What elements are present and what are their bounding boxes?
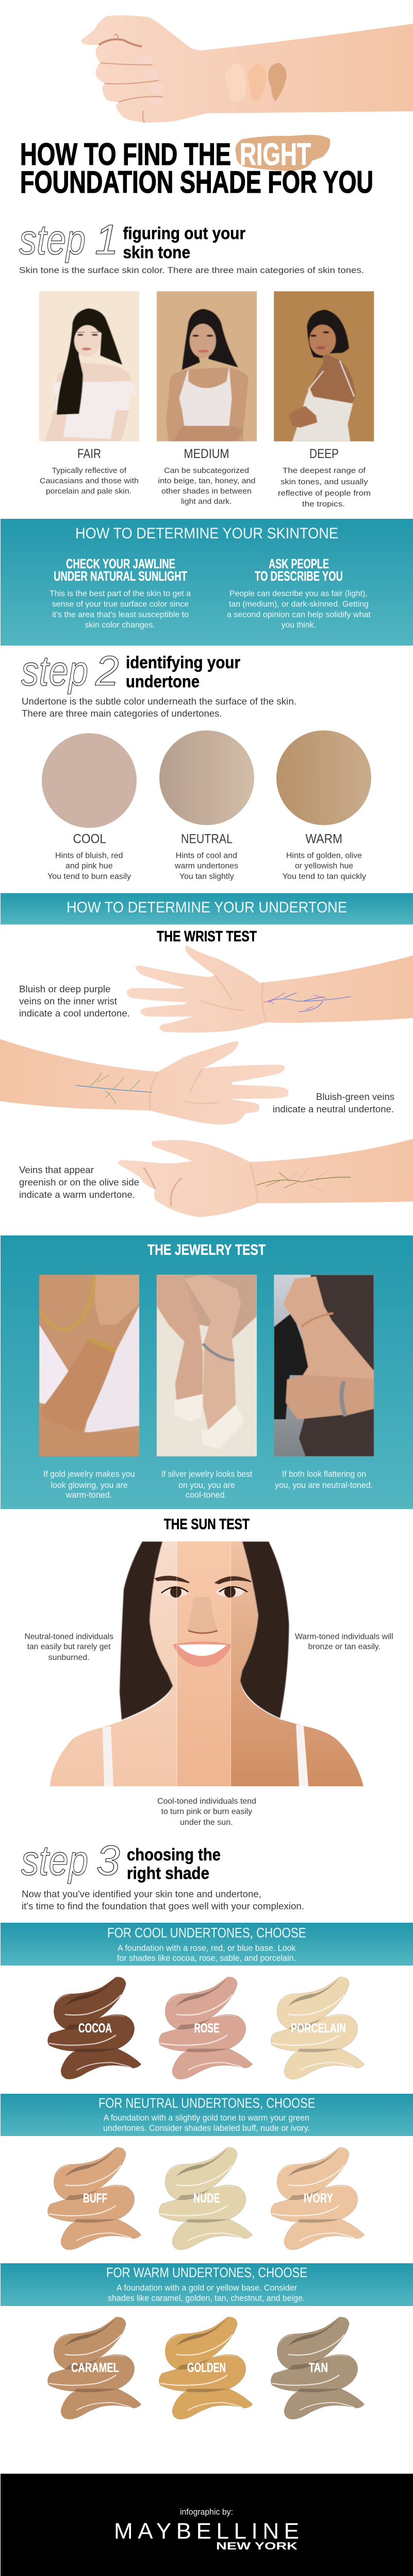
undertone: warm: Hints of golden, olive — [286, 852, 362, 860]
tip: ask people: tan (medium), or dark-skinned. Getting — [229, 600, 369, 609]
footer: infographic by: — [180, 2507, 233, 2517]
heading: the wrist test: THE WRIST TEST — [157, 928, 257, 945]
banner: cool undertones: FOR COOL UNDERTONES, CHOOSE — [107, 1925, 306, 1940]
caption: silver: If silver jewelry looks best — [161, 1469, 252, 1479]
caption: deep: the tropics. — [302, 500, 345, 509]
photo: silver jewelry — [154, 1272, 259, 1459]
tip: jawline: skin color changes. — [85, 621, 155, 630]
caption: gold — [43, 1469, 135, 1500]
undertone: warm: WARM — [305, 832, 342, 846]
caption: deep — [278, 447, 371, 509]
wrist test: neutral hand: indicate a neutral undertone. — [273, 1104, 394, 1114]
finger creases — [99, 34, 163, 123]
arm and fist — [81, 15, 413, 123]
banner: cool undertones: for shades like cocoa, rose, sable, and porcelain. — [117, 1954, 296, 1963]
banner: neutral undertones: A foundation with a slightly gold tone to warm your green — [104, 2113, 309, 2123]
heading: the sun test: THE SUN TEST — [164, 1516, 250, 1533]
photo: mixed jewelry — [271, 1272, 376, 1459]
caption: fair: porcelain and pale skin. — [46, 487, 131, 496]
banner: warm undertones: A foundation with a gold or yellow base. Consider — [117, 2283, 297, 2293]
swatch: porcelain: PORCELAIN — [291, 2021, 346, 2036]
undertone: cool: You tend to burn easily — [47, 872, 131, 881]
caption: fair: Typically reflective of — [52, 466, 127, 475]
undertone: neutral — [159, 731, 254, 881]
banner: cool undertones: A foundation with a rose, red, or blue base. Look — [118, 1943, 296, 1953]
step 3 intro — [22, 1889, 304, 1911]
wrist test: neutral hand: Bluish-green veins — [316, 1092, 394, 1102]
photo: sun test portrait — [50, 1541, 364, 1786]
step 2 heading: identifying your — [126, 653, 240, 672]
caption: both — [275, 1469, 373, 1490]
banner: cool undertones — [1, 1923, 413, 1965]
undertone: cool: and pink hue — [65, 861, 113, 871]
step 2 heading: undertone — [126, 672, 200, 691]
step 1 heading: figuring out your — [123, 224, 245, 243]
tip: jawline: sense of your true surface color since — [52, 600, 189, 609]
swatch: golden: GOLDEN — [187, 2361, 226, 2375]
swatch: tan — [271, 2317, 365, 2419]
foundation smear behind RIGHT — [235, 135, 330, 171]
step 1 heading: skin tone — [123, 243, 190, 262]
undertone: neutral: warm undertones — [174, 861, 238, 871]
tip: jawline: CHECK YOUR JAWLINE — [66, 556, 175, 571]
undertone: warm: or yellowish hue — [295, 861, 353, 871]
step 3 heading — [21, 1837, 221, 1884]
photo: gold jewelry — [37, 1272, 142, 1459]
photo: fair — [37, 289, 142, 443]
tip: ask people: you think. — [282, 621, 316, 630]
caption: medium: Can be subcategorized — [164, 466, 249, 475]
step 2 intro: Undertone is the subtle color underneath the surface of the skin. — [22, 697, 296, 707]
caption: fair: Caucasians and those with — [40, 477, 139, 485]
tip: jawline: UNDER NATURAL SUNLIGHT — [54, 568, 187, 584]
panel: the jewelry test: THE JEWELRY TEST — [147, 1242, 266, 1258]
tip: jawline: it's the area that's least susceptible to — [52, 611, 189, 619]
caption: gold: look glowing, you are — [51, 1481, 128, 1490]
panel: how to determine your skintone — [1, 519, 413, 646]
swatch: porcelain — [271, 1977, 365, 2079]
swatch: nude — [159, 2147, 253, 2250]
caption: both: If both look flattering on — [282, 1469, 366, 1479]
panel: how to determine your skintone: HOW TO DETERMINE YOUR SKINTONE — [75, 525, 338, 542]
swatch: ivory: IVORY — [304, 2191, 333, 2206]
step 1 heading — [19, 216, 245, 263]
step 3 heading: right shade — [127, 1863, 209, 1883]
foundation dabs — [225, 63, 287, 102]
step 2 intro: There are three main categories of undertones. — [22, 708, 222, 719]
banner: warm undertones — [1, 2263, 413, 2306]
caption: fair — [40, 447, 139, 496]
swatch: caramel: CARAMEL — [71, 2361, 119, 2375]
nails — [137, 54, 163, 106]
step 3 heading: step — [21, 1837, 88, 1884]
step 3 intro: it's time to find the foundation that goes well with your complexion. — [22, 1901, 304, 1911]
wrist test: warm hand: greenish or on the olive side — [19, 1177, 139, 1188]
swatch: caramel — [47, 2317, 141, 2419]
callout: neutral-toned — [25, 1632, 113, 1662]
caption: deep: DEEP — [309, 447, 339, 461]
wrist test: warm hand: indicate a warm undertone. — [19, 1190, 135, 1200]
veins — [76, 1073, 152, 1104]
caption: deep: reflective of people from — [278, 489, 371, 498]
veins — [263, 993, 350, 1012]
wrist test: cool hand — [19, 945, 413, 1032]
logo: Maybelline New York: MAYBELLINE — [114, 2519, 299, 2544]
callout: neutral-toned: tan easily but rarely get — [27, 1642, 111, 1651]
tip: ask people — [227, 556, 371, 630]
caption: silver: cool-toned. — [186, 1490, 227, 1500]
tip: ask people: People can describe you as fair (light), — [229, 589, 368, 598]
step 3 intro: Now that you've identified your skin tone and undertone, — [22, 1889, 261, 1899]
caption: medium — [158, 447, 256, 506]
caption: medium: MEDIUM — [184, 447, 229, 461]
step 1 heading: step — [19, 216, 86, 263]
hero: arm with foundation swatches — [81, 15, 413, 123]
caption: deep: skin tones, and usually — [280, 478, 368, 486]
swatch: rose — [159, 1977, 253, 2079]
banner: how to determine your undertone — [1, 893, 413, 924]
undertone: warm — [276, 731, 371, 881]
caption: gold: If gold jewelry makes you — [43, 1469, 135, 1479]
undertone: neutral: NEUTRAL — [181, 832, 233, 846]
wrist test: cool hand: Bluish or deep purple — [19, 984, 110, 994]
banner: warm undertones: shades like caramel, golden, tan, chestnut, and beige. — [108, 2294, 305, 2303]
callout: cool-toned — [157, 1797, 256, 1827]
step 2 heading: 2 — [95, 648, 119, 694]
undertone: neutral: Hints of cool and — [176, 852, 237, 860]
step 1 intro: Skin tone is the surface skin color. There are three main categories of skin tones. — [19, 265, 364, 275]
step 3 heading: choosing the — [127, 1845, 221, 1864]
swatch: buff: BUFF — [83, 2191, 107, 2206]
photo: deep — [271, 289, 376, 443]
swatch: tan: TAN — [309, 2361, 328, 2375]
wrist test: neutral hand — [0, 1039, 394, 1125]
panel: the jewelry test — [1, 1235, 413, 1509]
wrist test: warm hand — [19, 1139, 413, 1217]
step 3 heading: 3 — [96, 1837, 120, 1884]
tip: jawline — [49, 556, 191, 630]
photo: medium — [154, 289, 259, 443]
title: RIGHT — [240, 137, 311, 172]
banner: neutral undertones: FOR NEUTRAL UNDERTONES, CHOOSE — [98, 2095, 315, 2111]
swatch: rose: ROSE — [194, 2021, 220, 2036]
caption: gold: warm-toned. — [65, 1490, 112, 1500]
caption: silver — [161, 1469, 252, 1500]
caption: deep: The deepest range of — [283, 466, 366, 475]
undertone: cool: COOL — [73, 832, 106, 846]
callout: cool-toned: under the sun. — [180, 1818, 233, 1827]
callout: neutral-toned: sunburned. — [48, 1653, 90, 1662]
callout: warm-toned: bronze or tan easily. — [308, 1642, 381, 1651]
footer — [1, 2473, 413, 2576]
step 2 heading: step — [21, 648, 88, 694]
undertone: cool: Hints of bluish, red — [55, 852, 123, 860]
undertone: neutral: You tan slightly — [179, 872, 234, 881]
callout: neutral-toned: Neutral-toned individuals — [25, 1632, 113, 1641]
title — [20, 135, 373, 199]
swatch: nude: NUDE — [193, 2191, 220, 2206]
step 2 heading — [21, 648, 240, 694]
caption: silver: on you, you are — [178, 1481, 235, 1490]
callout: cool-toned: to turn pink or burn easily — [161, 1807, 252, 1816]
banner: neutral undertones: undertones. Consider shades labeled buff, nude or ivory. — [103, 2124, 310, 2133]
caption: medium: light and dark. — [181, 497, 232, 506]
banner: how to determine your undertone: HOW TO DETERMINE YOUR UNDERTONE — [67, 899, 347, 916]
swatch: ivory — [271, 2147, 365, 2250]
caption: both: you, you are neutral-toned. — [275, 1481, 373, 1490]
undertone: warm: You tend to tan quickly — [283, 872, 366, 881]
callout: warm-toned — [295, 1632, 393, 1651]
swatch: cocoa: COCOA — [78, 2021, 112, 2036]
callout: warm-toned: Warm-toned individuals will — [295, 1632, 393, 1641]
banner: warm undertones: FOR WARM UNDERTONES, CHOOSE — [106, 2265, 307, 2280]
caption: medium: into beige, tan, honey, and — [158, 477, 256, 485]
step 1 heading: 1 — [95, 216, 119, 263]
undertone: cool — [42, 733, 137, 881]
tip: ask people: TO DESCRIBE YOU — [255, 568, 343, 584]
step 2 intro — [22, 697, 296, 719]
callout: cool-toned: Cool-toned individuals tend — [157, 1797, 256, 1806]
logo: Maybelline New York: NEW YORK — [216, 2541, 298, 2552]
title: HOW TO FIND THE — [20, 137, 231, 172]
caption: medium: other shades in between — [161, 487, 252, 496]
swatch: buff — [47, 2147, 141, 2250]
banner: neutral undertones — [1, 2094, 413, 2136]
veins — [257, 1167, 350, 1193]
tip: ask people: a second opinion can help solidify what — [227, 611, 371, 619]
caption: fair: FAIR — [77, 447, 101, 461]
swatch: cocoa — [47, 1977, 141, 2079]
wrist test: cool hand: veins on the inner wrist — [19, 996, 117, 1007]
wrist test: cool hand: indicate a cool undertone. — [19, 1008, 130, 1019]
tip: jawline: This is the best part of the skin to get a — [49, 589, 191, 598]
tip: ask people: ASK PEOPLE — [269, 556, 329, 571]
swatch: golden — [159, 2317, 253, 2419]
wrist test: warm hand: Veins that appear — [19, 1165, 94, 1175]
